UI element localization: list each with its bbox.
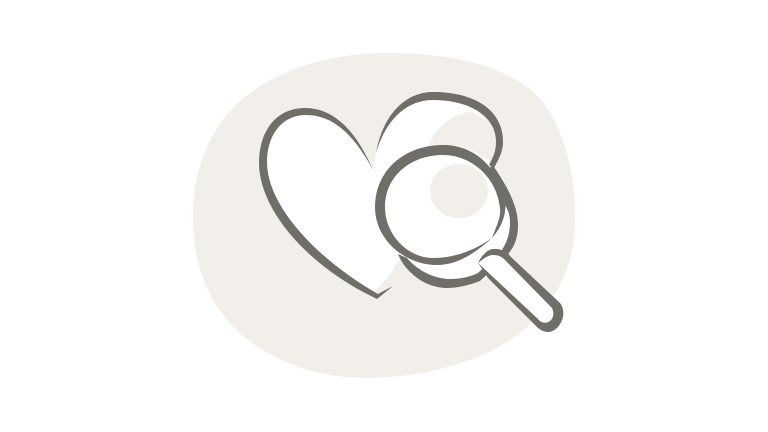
heart right outline — [376, 92, 503, 168]
handle inside — [478, 255, 553, 323]
heart left outline — [259, 108, 393, 299]
beige patch in right lobe — [428, 112, 499, 172]
magnifying glass — [375, 92, 563, 332]
lens highlight — [430, 164, 488, 218]
glass white body — [375, 145, 518, 288]
lens ring — [375, 145, 505, 265]
heart white fill — [262, 97, 497, 292]
outer crescent — [398, 164, 518, 288]
handle — [478, 249, 563, 332]
background blob — [193, 53, 575, 378]
heart — [259, 97, 499, 299]
handle outline — [478, 249, 563, 332]
